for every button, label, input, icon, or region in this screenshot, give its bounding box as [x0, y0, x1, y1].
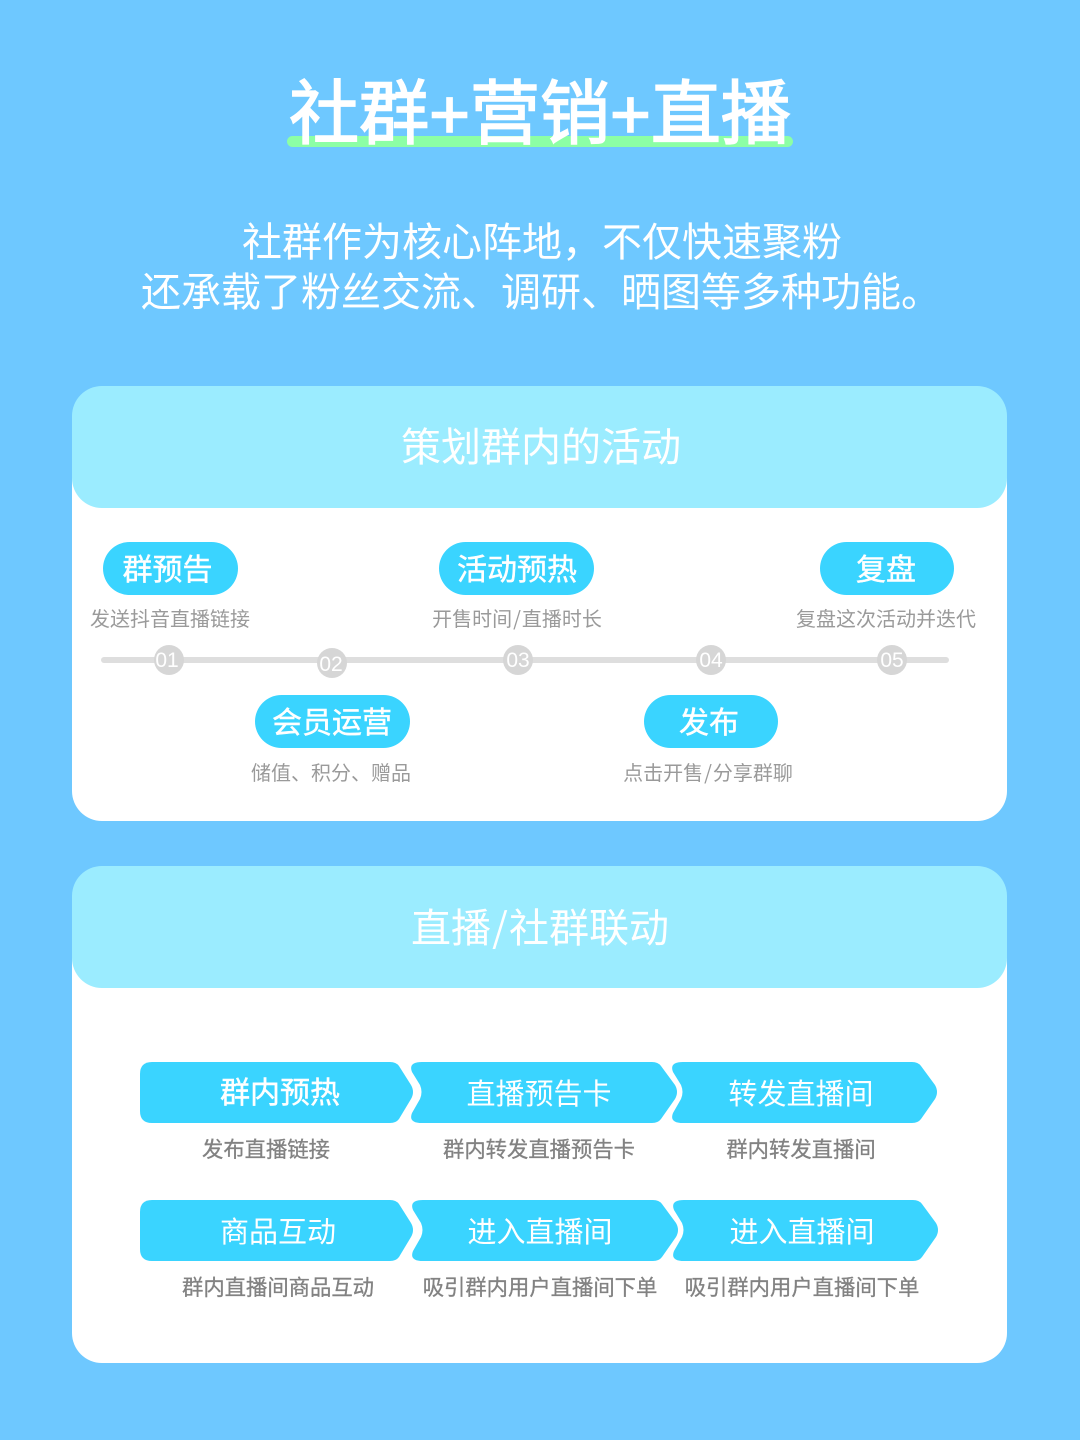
- flow step: enter live room A: 进入直播间: [467, 1216, 613, 1249]
- timeline: 03: [506, 649, 530, 672]
- step 2: member operations: 储值、积分、赠品: [251, 762, 411, 785]
- flow step: enter live room B: 进入直播间: [729, 1216, 875, 1249]
- timeline: 05: [880, 649, 904, 672]
- flow step: share live room: [672, 1062, 937, 1162]
- timeline: 04: [699, 649, 723, 672]
- step 5: review: 复盘: [856, 554, 916, 587]
- step 1: group preview: 群预告: [122, 554, 212, 587]
- step 5: review: 复盘这次活动并迭代: [796, 608, 976, 631]
- step 4: publish: 点击开售/分享群聊: [623, 757, 793, 786]
- flow step: enter live room A: 吸引群内用户直播间下单: [423, 1276, 657, 1300]
- panel: livestream and community linkage: [72, 866, 1007, 1363]
- flow step: share live room: 转发直播间: [728, 1078, 874, 1111]
- flow step: enter live room B: 吸引群内用户直播间下单: [685, 1276, 919, 1300]
- timeline: 02: [319, 653, 343, 676]
- flow step: group warm-up: [140, 1062, 413, 1162]
- panel heading: livestream and community linkage: 直播/社群联动: [411, 896, 669, 954]
- panel heading: livestream and community linkage: [72, 866, 1007, 988]
- flow step: product interaction: 商品互动: [220, 1216, 336, 1249]
- flow step: product interaction: 群内直播间商品互动: [182, 1276, 374, 1300]
- subtitle text: 还承载了粉丝交流、调研、晒图等多种功能。: [141, 271, 941, 315]
- flow step: product interaction: [140, 1200, 413, 1300]
- subtitle text: 社群作为核心阵地，不仅快速聚粉: [242, 221, 842, 265]
- panel heading: group activity planning: 策划群内的活动: [401, 426, 681, 470]
- subtitle text: [141, 221, 941, 315]
- flow step: group warm-up: 发布直播链接: [202, 1138, 330, 1162]
- flow step: live preview card: [411, 1062, 677, 1162]
- step 3: activity warm-up: 活动预热: [457, 554, 577, 587]
- flow step: enter live room A: [412, 1200, 678, 1300]
- step 2: member operations: [251, 695, 411, 785]
- step 3: activity warm-up: 开售时间/直播时长: [432, 603, 602, 632]
- flow step: live preview card: 直播预告卡: [466, 1078, 612, 1111]
- flow step: live preview card: 群内转发直播预告卡: [443, 1138, 635, 1162]
- panel: group activity planning: [72, 386, 1007, 821]
- timeline: [101, 645, 949, 678]
- flow step: enter live room B: [673, 1200, 938, 1300]
- step 4: publish: [623, 695, 793, 786]
- title: 社群+营销+直播: [289, 75, 791, 153]
- panel heading: group activity planning: [72, 386, 1007, 508]
- step 4: publish: 发布: [679, 707, 739, 740]
- step 5: review: [796, 542, 976, 631]
- step 3: activity warm-up: [432, 542, 602, 632]
- step 1: group preview: [90, 542, 250, 631]
- step 1: group preview: 发送抖音直播链接: [90, 608, 250, 631]
- flow step: share live room: 群内转发直播间: [726, 1138, 876, 1162]
- flow step: group warm-up: 群内预热: [220, 1077, 340, 1110]
- step 2: member operations: 会员运营: [272, 707, 392, 740]
- timeline: 01: [155, 649, 179, 672]
